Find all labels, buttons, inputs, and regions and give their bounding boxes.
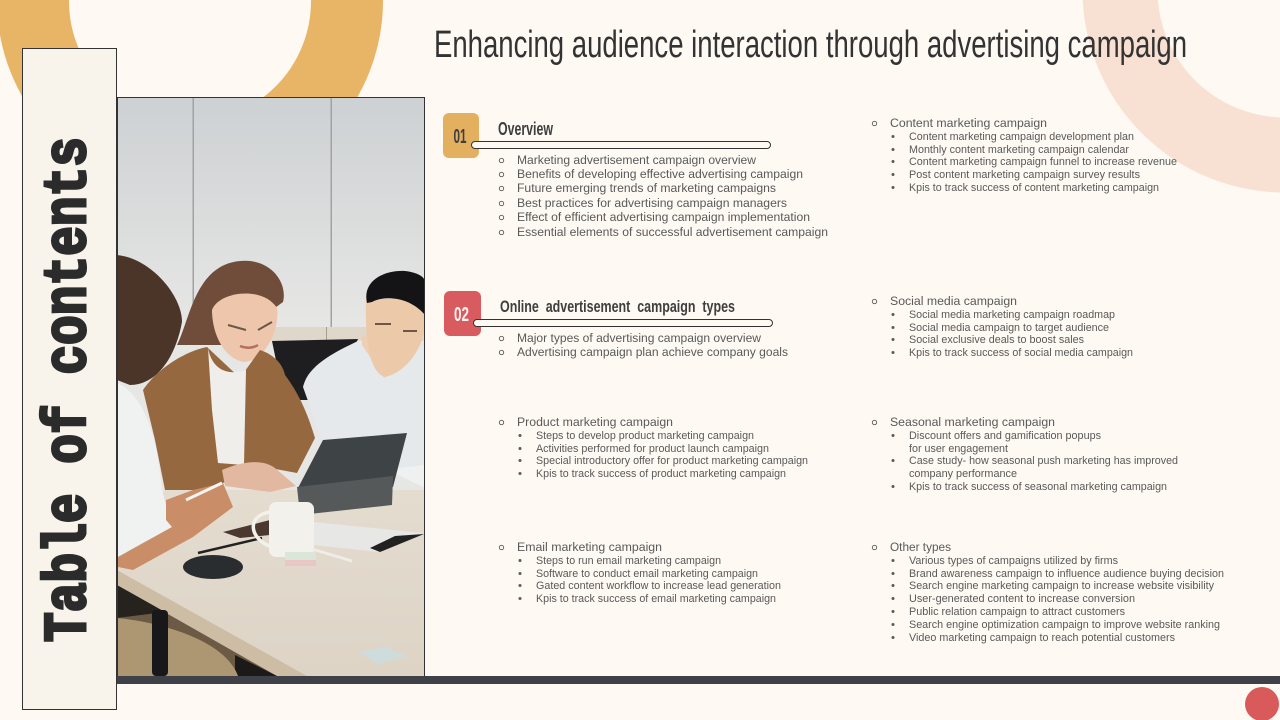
heading overview: Overview bbox=[498, 119, 554, 139]
heading: table of contents: Table of contents bbox=[36, 137, 104, 642]
list: product marketing campaign: Kpis to track success of product marketing campaign bbox=[536, 468, 786, 480]
list major types bbox=[499, 331, 788, 359]
footer circle bbox=[1245, 687, 1279, 720]
list overview: Benefits of developing effective advertising campaign bbox=[517, 167, 803, 181]
list: seasonal marketing campaign: Seasonal marketing campaign bbox=[890, 415, 1055, 429]
panel: vertical title bbox=[22, 48, 116, 710]
list: other types: Brand awareness campaign to influence audience buying decision bbox=[909, 568, 1224, 580]
list: email marketing campaign: Kpis to track success of email marketing campaign bbox=[536, 593, 776, 605]
list: other types: Video marketing campaign to reach potential customers bbox=[909, 632, 1175, 644]
footer bar bbox=[117, 676, 1280, 684]
list overview bbox=[499, 153, 828, 239]
list: seasonal marketing campaign: for user engagement bbox=[909, 443, 1008, 455]
list: email marketing campaign: Gated content workflow to increase lead generation bbox=[536, 580, 781, 592]
list: content marketing campaign bbox=[872, 116, 1177, 194]
list: other types: Search engine optimization campaign to improve website ranking bbox=[909, 619, 1220, 631]
list: seasonal marketing campaign: Kpis to track success of seasonal marketing campaign bbox=[909, 481, 1167, 493]
heading online types: Online advertisement campaign types bbox=[500, 297, 735, 316]
pill line bbox=[472, 142, 770, 148]
pill line bbox=[474, 320, 772, 326]
list: seasonal marketing campaign: Case study- how seasonal push marketing has improved bbox=[909, 455, 1178, 467]
list overview: Future emerging trends of marketing campaigns bbox=[517, 181, 776, 195]
list: other types: Search engine marketing campaign to increase website visibility bbox=[909, 580, 1215, 592]
list: social media campaign: Kpis to track success of social media campaign bbox=[909, 347, 1133, 359]
list: email marketing campaign: Software to conduct email marketing campaign bbox=[536, 568, 758, 580]
list: content marketing campaign: Kpis to track success of content marketing campaign bbox=[909, 182, 1159, 194]
list: product marketing campaign: Product marketing campaign bbox=[517, 415, 673, 429]
section 01: overview bbox=[443, 113, 828, 239]
list: social media campaign: Social media campaign to target audience bbox=[909, 322, 1109, 334]
badge 02 bbox=[444, 291, 481, 336]
list: content marketing campaign: Content marketing campaign bbox=[890, 116, 1047, 130]
list: content marketing campaign: Post content marketing campaign survey results bbox=[909, 169, 1140, 181]
photo: team around a table with a tablet bbox=[117, 97, 425, 677]
list major types: Major types of advertising campaign overview bbox=[517, 331, 761, 345]
list: social media campaign bbox=[872, 294, 1133, 359]
list overview: Best practices for advertising campaign managers bbox=[517, 196, 787, 210]
list: seasonal marketing campaign: Discount offers and gamification popups bbox=[909, 430, 1101, 442]
badge 01 bbox=[443, 113, 479, 158]
list: content marketing campaign: Monthly content marketing campaign calendar bbox=[909, 144, 1129, 156]
list: product marketing campaign: Activities performed for product launch campaign bbox=[536, 443, 769, 455]
list: email marketing campaign: Steps to run email marketing campaign bbox=[536, 555, 721, 567]
list: content marketing campaign: Content marketing campaign development plan bbox=[909, 131, 1134, 143]
list overview: Essential elements of successful advertisement campaign bbox=[517, 225, 828, 239]
list: other types: User-generated content to increase conversion bbox=[909, 593, 1135, 605]
list: other types: Various types of campaigns utilized by firms bbox=[909, 555, 1118, 567]
list: email marketing campaign: Email marketing campaign bbox=[517, 540, 662, 554]
list major types: Advertising campaign plan achieve company goals bbox=[517, 345, 788, 359]
decorative orange ring bbox=[33, 0, 347, 158]
list: product marketing campaign: Steps to develop product marketing campaign bbox=[536, 430, 754, 442]
list: content marketing campaign: Content marketing campaign funnel to increase revenue bbox=[909, 156, 1177, 168]
list: other types: Other types bbox=[890, 540, 951, 554]
list: seasonal marketing campaign: company performance bbox=[909, 468, 1017, 480]
list: social media campaign: Social media marketing campaign roadmap bbox=[909, 309, 1115, 321]
list overview: Effect of efficient advertising campaign implementation bbox=[517, 210, 810, 224]
badge 02: 02 bbox=[454, 304, 469, 326]
list: email marketing campaign bbox=[499, 540, 781, 605]
list: seasonal marketing campaign bbox=[872, 415, 1178, 493]
list: social media campaign: Social media campaign bbox=[890, 294, 1017, 308]
list overview: Marketing advertisement campaign overview bbox=[517, 153, 756, 167]
list: other types bbox=[872, 540, 1224, 644]
list: social media campaign: Social exclusive deals to boost sales bbox=[909, 334, 1084, 346]
list: product marketing campaign: Special introductory offer for product marketing campaign bbox=[536, 455, 808, 467]
list: product marketing campaign bbox=[499, 415, 808, 480]
list: other types: Public relation campaign to attract customers bbox=[909, 606, 1125, 618]
section 02: online advertisement campaign types bbox=[444, 291, 788, 359]
badge 01: 01 bbox=[454, 126, 466, 148]
decorative pink ring bbox=[1120, 0, 1280, 155]
